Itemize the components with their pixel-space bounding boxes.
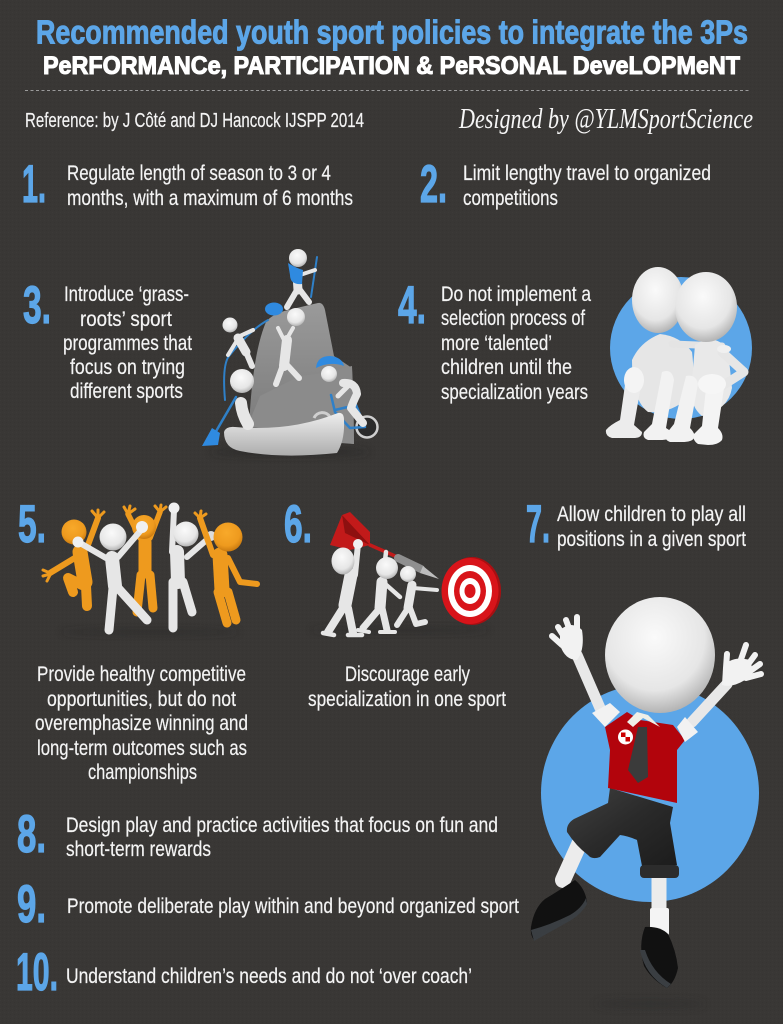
orange figure left (43, 510, 104, 606)
item 2 (420, 155, 711, 214)
subtitle: PeRFORMANCe, PARTICIPATION & PeRSONAL DeveLOPMeNT (43, 52, 740, 80)
item 4: more ‘talented’ (441, 331, 552, 355)
item 5 number: 5. (18, 495, 46, 554)
blue circle (541, 684, 759, 902)
item 9 (17, 875, 519, 934)
item 1: 1. (22, 155, 46, 214)
left figure (606, 267, 722, 440)
target (442, 557, 501, 625)
icon: jumping orange and white group (43, 502, 257, 635)
arms (552, 617, 761, 722)
item 4: Do not implement a (441, 282, 591, 306)
item 9: Promote deliberate play within and beyond organized sport (67, 894, 519, 918)
item 5 text: Provide healthy competitive (37, 662, 246, 686)
orange figure middle (124, 505, 166, 612)
item 2: Limit lengthy travel to organized (463, 161, 711, 185)
item 4: selection process of (441, 306, 585, 330)
icon: two seated figures on blue circle (606, 267, 752, 445)
shorts (567, 788, 679, 878)
item 2: 2. (420, 155, 447, 214)
item 1: months, with a maximum of 6 months (67, 186, 353, 210)
item 3 (23, 276, 192, 403)
head (605, 597, 715, 713)
collar (627, 712, 660, 727)
item 5 text (35, 662, 248, 784)
canoe (224, 413, 344, 456)
orange figure right (195, 511, 257, 623)
item 4: 4. (398, 276, 426, 335)
item 6 text: specialization in one sport (308, 687, 506, 711)
item 10 (16, 943, 472, 1002)
item 5 text: opportunities, but do not (47, 687, 236, 711)
first figure (323, 539, 363, 635)
item 7: 7. (526, 495, 550, 554)
item 10: Understand children’s needs and do not ‘over coach’ (66, 964, 472, 988)
red shirt (592, 703, 698, 803)
item 10: 10. (16, 943, 58, 1002)
item 7: Allow children to play all (557, 502, 746, 526)
third figure (397, 566, 437, 625)
reference: Reference: by J Côté and DJ Hancock IJSPP 2014 (25, 109, 364, 132)
header (25, 14, 753, 135)
item 3: Introduce ‘grass- (64, 282, 189, 306)
icon: climbing, cycling and canoeing figures (202, 249, 378, 456)
item 8 (17, 805, 498, 864)
canoeist (202, 369, 254, 446)
legs (563, 838, 669, 935)
item 8: Design play and practice activities that focus on fun and (66, 813, 498, 837)
rock (248, 303, 354, 444)
rope (224, 320, 268, 400)
dart (330, 512, 439, 579)
bicycle (314, 356, 378, 438)
shoes (531, 880, 678, 988)
white figure right (168, 502, 216, 628)
item 9: 9. (17, 875, 46, 934)
illustration: jumping child on blue circle (531, 597, 761, 1008)
item 1 (22, 155, 353, 214)
item 6 text (308, 662, 506, 711)
second figure (358, 552, 400, 632)
item 2: competitions (463, 186, 558, 210)
left climber (222, 318, 253, 366)
item 8: 8. (17, 805, 46, 864)
item 3: 3. (23, 276, 51, 335)
item 3: focus on trying (70, 355, 185, 379)
top climber (287, 249, 317, 307)
tie (628, 727, 648, 783)
item 5 text: championships (88, 760, 197, 784)
item 5 text: overemphasize winning and (35, 711, 248, 735)
badge (618, 730, 633, 744)
item 3: different sports (70, 379, 183, 403)
item 6 text: Discourage early (345, 662, 470, 686)
item 3: programmes that (63, 331, 192, 355)
item 5 text: long-term outcomes such as (37, 736, 247, 760)
item 8: short-term rewards (66, 837, 211, 861)
icon: figures carrying dart to target (310, 512, 501, 635)
white figure left (72, 521, 148, 630)
item 7 (526, 495, 746, 554)
right figure (666, 272, 744, 445)
item 3: roots’ sport (80, 307, 172, 331)
item 4: children until the (441, 355, 572, 379)
item 4 (398, 276, 591, 404)
item 6 number: 6. (284, 495, 312, 554)
middle climber (265, 302, 305, 384)
item 4: specialization years (441, 380, 588, 404)
item 1: Regulate length of season to 3 or 4 (67, 161, 331, 185)
